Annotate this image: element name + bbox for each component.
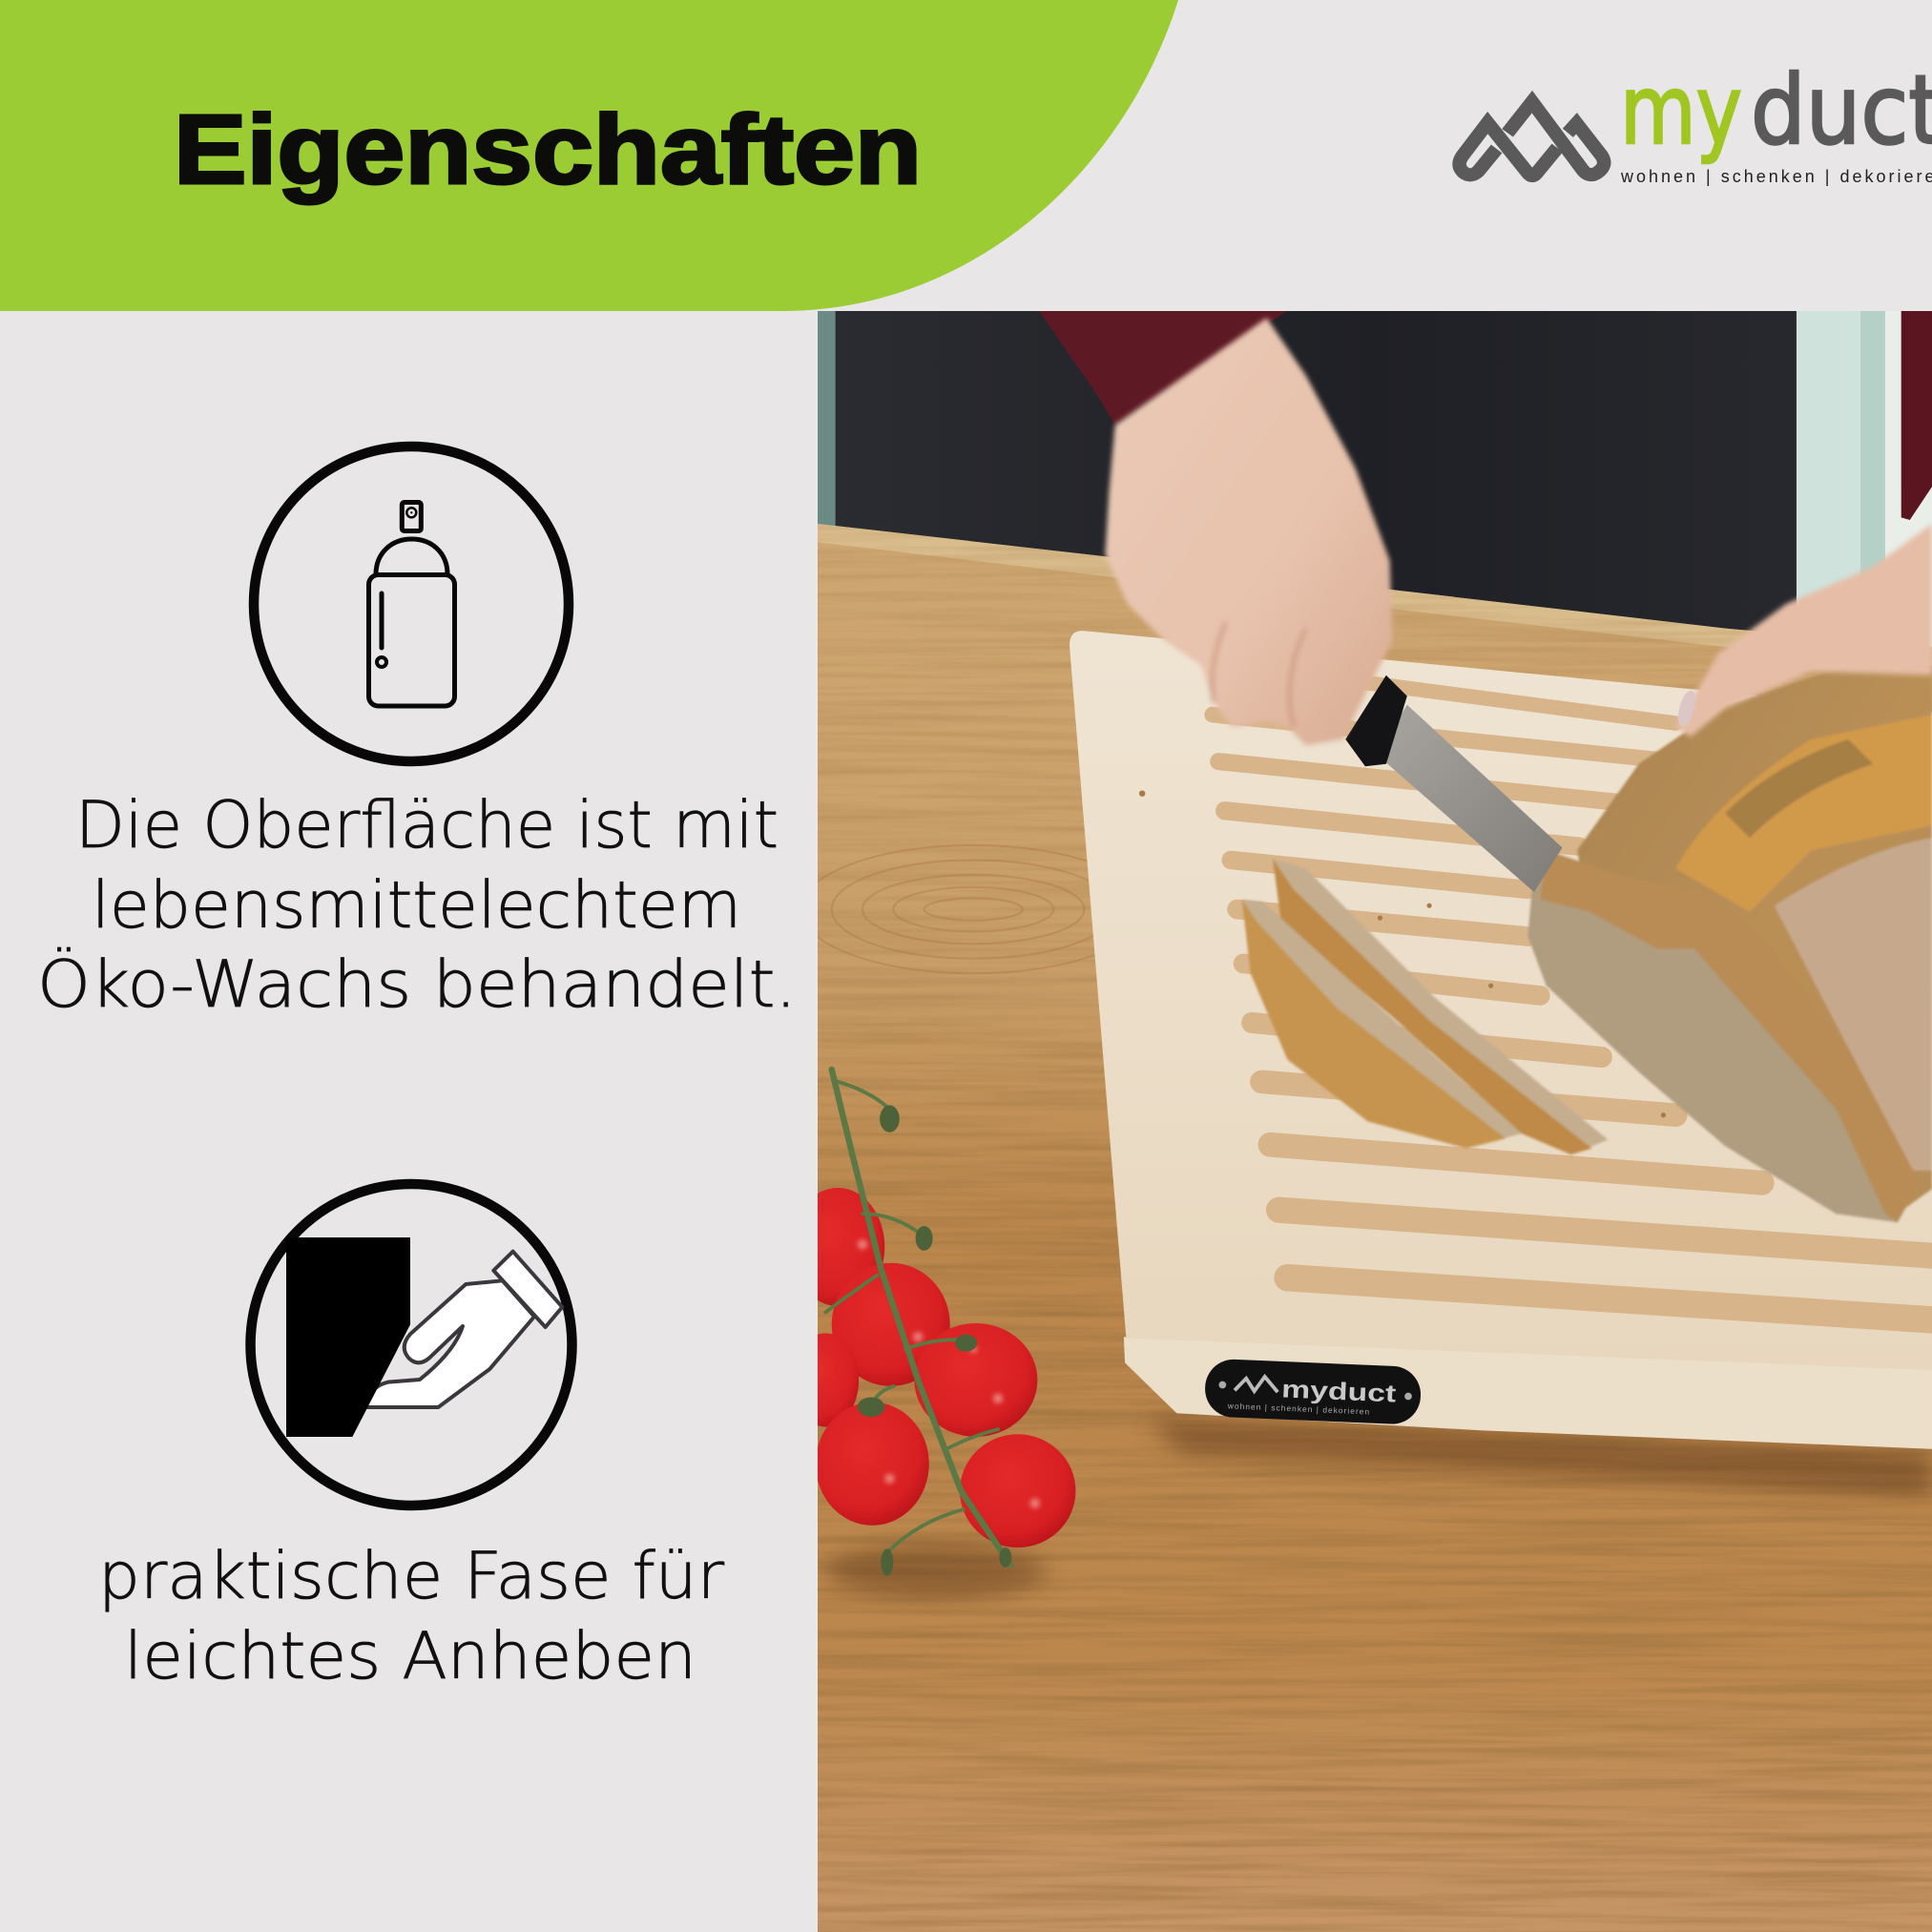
metal name plate: myduct (1281, 1376, 1397, 1407)
text: food-safe eco wax: Öko-Wachs behandelt. (37, 947, 797, 1023)
board shadow on table (1146, 1417, 1932, 1497)
text: food-safe eco wax (37, 788, 797, 1023)
loaf cut face (1527, 876, 1897, 1223)
knife (1345, 675, 1563, 892)
title: Eigenschaften (174, 94, 922, 204)
text: food-safe eco wax: lebensmittelechtem (92, 868, 741, 944)
hand holding knife (1105, 318, 1392, 745)
logo: myduct (1460, 54, 1932, 186)
logo wordmark: my (1620, 54, 1742, 166)
bread slices (1242, 859, 1608, 1154)
hand (363, 1280, 534, 1407)
crumbs (1139, 790, 1666, 1117)
text: practical chamfer: leichtes Anheben (124, 1619, 696, 1694)
icon: hand lifting board in circle (250, 1184, 572, 1506)
cuff (493, 1252, 562, 1327)
logo mark: interlocking mountains (1460, 102, 1604, 176)
text: practical chamfer (98, 1539, 724, 1694)
text: food-safe eco wax: Die Oberfläche ist mit (75, 788, 779, 863)
metal name plate (1204, 1359, 1422, 1425)
board slots (1213, 681, 1932, 1320)
black board block (286, 1237, 410, 1437)
person and background (818, 311, 1932, 632)
loaf face crust band (1540, 850, 1920, 1222)
hand holding loaf (1674, 524, 1932, 737)
bread loaf (1527, 665, 1932, 1222)
tomato fruits (791, 1188, 1075, 1548)
metal name plate: wohnen | schenken | dekorieren (1227, 1401, 1370, 1417)
board top surface (1070, 631, 1932, 1370)
tomato highlights (858, 1239, 1040, 1508)
cutting board (1070, 631, 1932, 1449)
photo: slicing bread on a wooden board (791, 310, 1932, 1932)
vine tufts (858, 1105, 1011, 1576)
text: practical chamfer: praktische Fase für (98, 1539, 724, 1614)
loaf crust (1577, 665, 1932, 1214)
tomatoes on the vine (791, 1070, 1075, 1598)
vine (825, 1070, 1010, 1565)
icon: spray can in circle (254, 447, 569, 761)
wooden table (800, 524, 1932, 1932)
header: green banner (0, 0, 1178, 311)
board front face (1124, 1337, 1932, 1449)
